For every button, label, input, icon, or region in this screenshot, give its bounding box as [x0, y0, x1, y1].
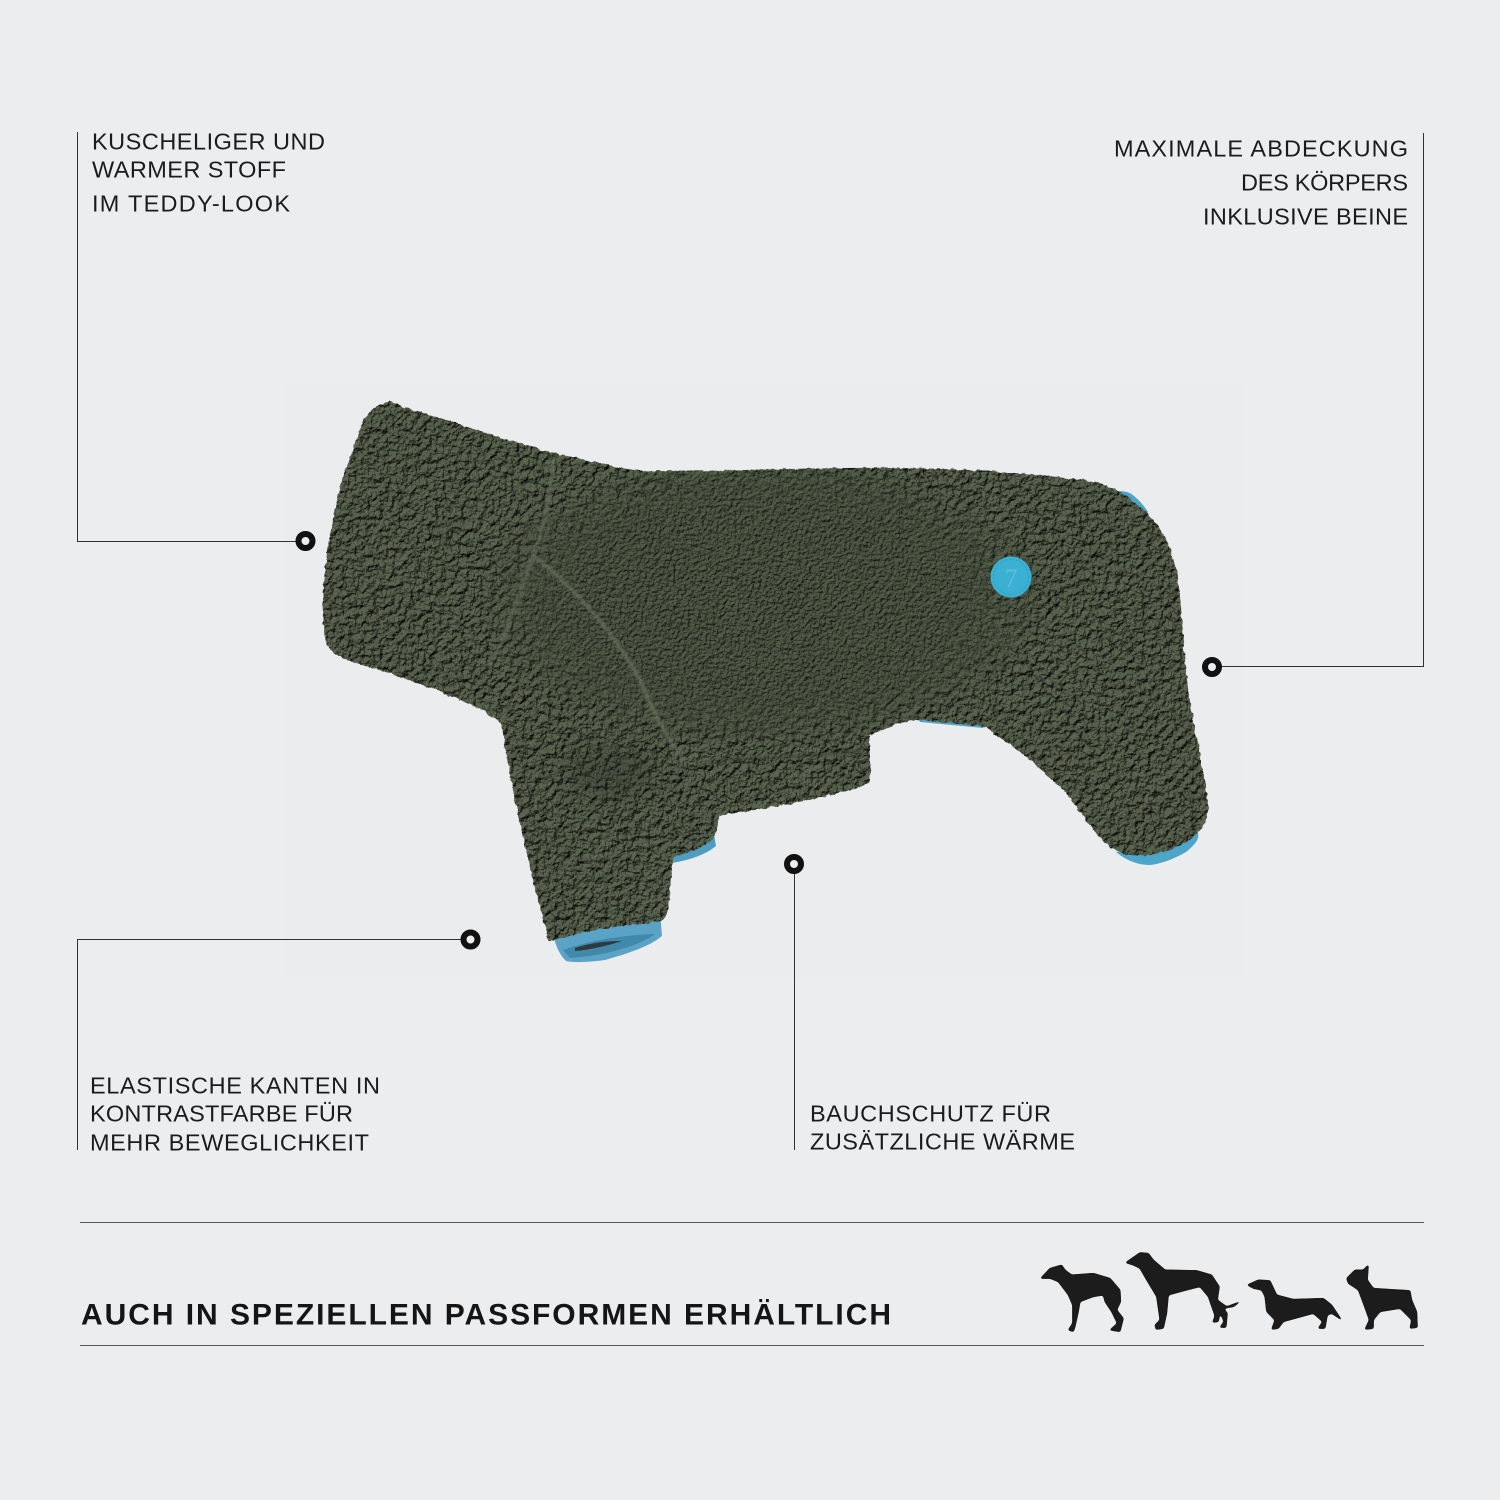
finer fleece at body centre [483, 468, 1034, 744]
leader line [78, 132, 305, 542]
callout text: DES KÖRPERS [1241, 170, 1408, 196]
callout bottom center: belly protection [787, 857, 1075, 1154]
icon: french bulldog [1347, 1265, 1417, 1329]
round blue logo badge [990, 556, 1032, 598]
icons: four dog breed silhouettes [1041, 1253, 1417, 1332]
seams and shadows [488, 456, 868, 798]
callout text [90, 1072, 380, 1156]
callout top left: fabric [78, 128, 325, 548]
footer rule top [80, 1222, 1424, 1223]
callout bottom left: elastic edges [78, 932, 478, 1156]
marker [464, 932, 478, 946]
marker [787, 857, 801, 871]
footer rule bottom [80, 1345, 1424, 1346]
leader line [78, 940, 470, 1150]
callout text: KUSCHELIGER UND [92, 128, 325, 154]
callout text: MAXIMALE ABDECKUNG [1114, 136, 1408, 162]
callout text: WARMER STOFF [92, 156, 286, 182]
leader line [794, 864, 796, 1150]
callout text [92, 128, 325, 216]
leader line [1212, 133, 1424, 666]
far front leg with blue cuff [668, 790, 719, 863]
callout text: MEHR BEWEGLICHKEIT [90, 1130, 369, 1156]
callout text [810, 1100, 1075, 1154]
callout text: INKLUSIVE BEINE [1203, 204, 1408, 230]
callout text: ELASTISCHE KANTEN IN [90, 1072, 380, 1098]
product: green teddy dog coat [323, 402, 1208, 962]
callout text: ZUSÄTZLICHE WÄRME [810, 1128, 1075, 1154]
callout text: IM TEDDY-LOOK [92, 190, 290, 216]
product photo backdrop [285, 380, 1245, 980]
round blue logo badge: 7 [1004, 564, 1018, 593]
front cuff [550, 912, 662, 962]
callout text [1114, 136, 1408, 230]
blue trim: rear opening, belly and hind cuff [918, 491, 1198, 865]
coat body fleece [323, 402, 1208, 942]
icon: dachshund [1247, 1280, 1342, 1329]
marker [298, 534, 312, 548]
callout text: BAUCHSCHUTZ FÜR [810, 1100, 1051, 1126]
callout text: KONTRASTFARBE FÜR [90, 1100, 353, 1126]
marker [1205, 660, 1219, 674]
icon: greyhound [1126, 1253, 1240, 1329]
callout top right: coverage [1114, 133, 1424, 674]
icon: whippet [1041, 1265, 1123, 1332]
footer heading: AUCH IN SPEZIELLEN PASSFORMEN ERHÄLTLICH [81, 1298, 891, 1332]
